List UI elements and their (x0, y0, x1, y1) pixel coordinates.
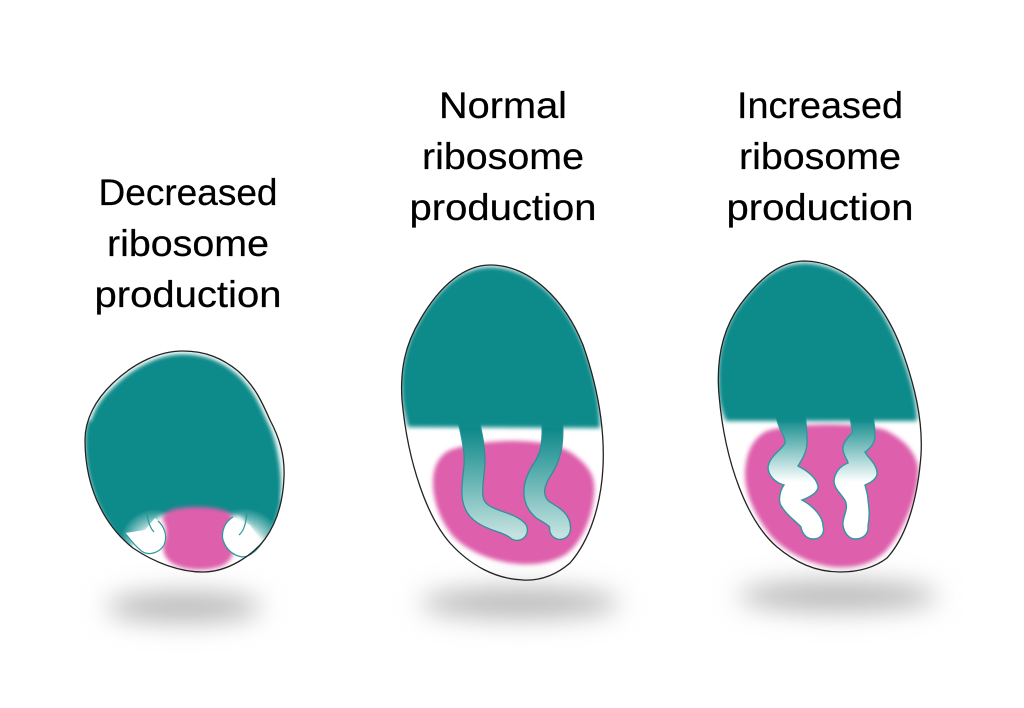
heading: increased: Increased (737, 85, 903, 126)
teal cap (718, 263, 917, 421)
nucleolus cell (402, 265, 603, 580)
heading: normal: ribosome (422, 136, 584, 177)
heading: increased: ribosome (739, 136, 901, 177)
panel: increased ribosome production (718, 85, 938, 611)
shadow (738, 581, 938, 611)
pink region (433, 441, 594, 564)
strand: right (834, 415, 877, 539)
panel: normal ribosome production (402, 85, 620, 618)
panel: decreased ribosome production (85, 172, 285, 622)
pink region (162, 507, 234, 570)
strand: right (534, 418, 560, 529)
heading: normal: Normal (439, 85, 567, 126)
strand: right (222, 512, 262, 557)
heading: normal: production (410, 187, 596, 228)
heading: decreased: production (94, 274, 282, 315)
strand: left (125, 514, 166, 554)
heading: increased: production (726, 187, 914, 228)
outline (402, 265, 603, 580)
shadow (106, 592, 262, 622)
nucleolus cell (85, 351, 285, 592)
strand: left (468, 418, 517, 530)
outline (85, 351, 284, 572)
pink region (745, 424, 918, 567)
nucleolus cell (718, 261, 921, 572)
heading: decreased: ribosome (107, 223, 269, 264)
strand: left (768, 415, 824, 539)
heading: decreased: Decreased (98, 172, 278, 213)
infographic: ribosome production in three nucleoli (84, 90, 942, 637)
outline (718, 261, 921, 572)
teal cap (402, 267, 600, 428)
shadow (420, 588, 620, 618)
